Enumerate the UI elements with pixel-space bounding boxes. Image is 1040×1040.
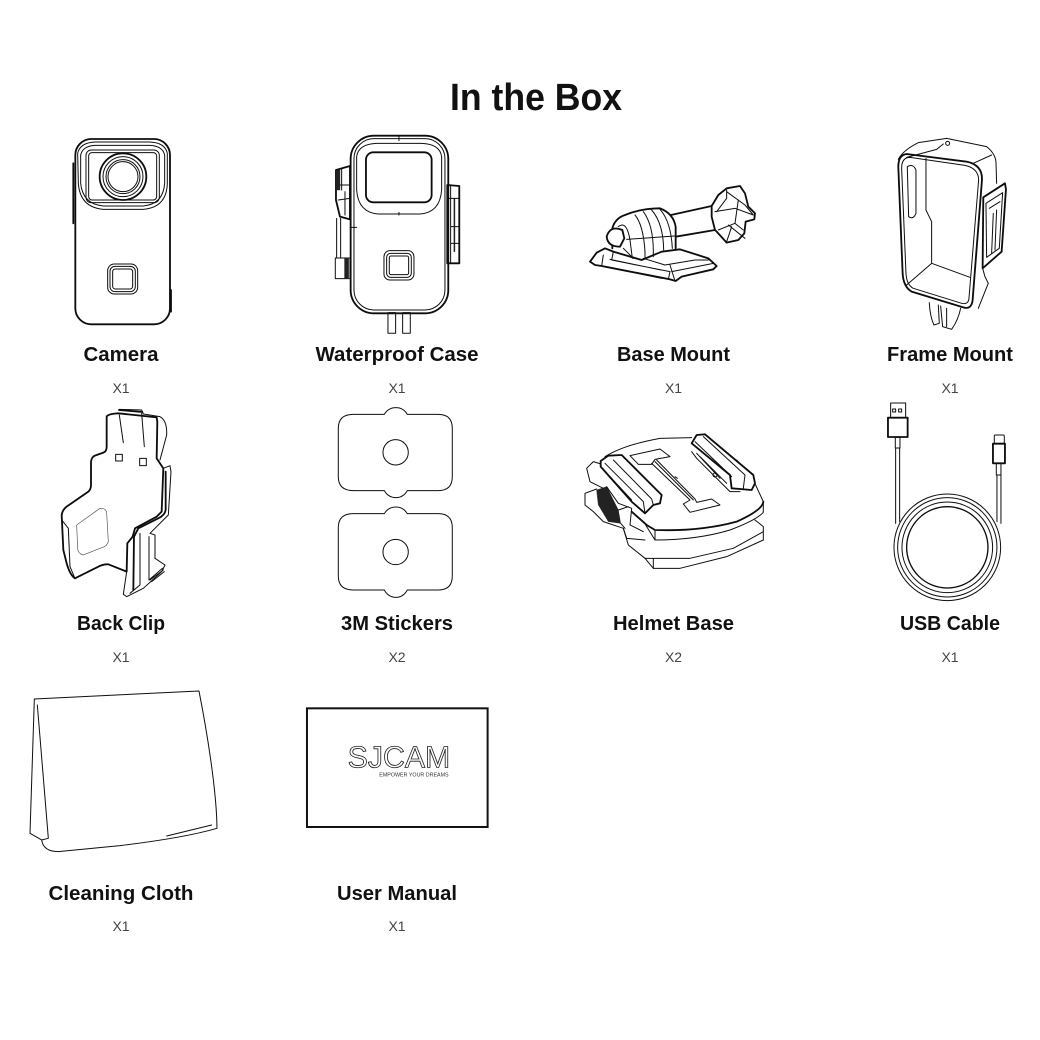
item: cleaning cloth	[30, 691, 217, 934]
quantity: waterproof case: X1	[388, 380, 406, 396]
item: frame mount	[887, 138, 1013, 396]
quantity: helmet base: X2	[665, 649, 682, 665]
quantity: back clip: X1	[112, 649, 130, 665]
icon: waterproof case	[335, 136, 459, 333]
item: base mount	[590, 186, 755, 396]
icon: base mount	[590, 186, 755, 281]
quantity: USB cable: X1	[941, 649, 959, 665]
label: user manual: User Manual	[337, 882, 457, 905]
quantity: cleaning cloth: X1	[112, 918, 130, 934]
label: back clip: Back Clip	[77, 612, 165, 635]
icon: frame mount	[898, 138, 1006, 329]
quantity: camera: X1	[112, 380, 130, 396]
item: helmet base	[585, 434, 763, 665]
title: In the Box	[450, 77, 622, 119]
quantity: 3M stickers: X2	[388, 649, 406, 665]
logo: SJCAM	[348, 740, 450, 774]
label: helmet base: Helmet Base	[613, 612, 734, 635]
icon: helmet base	[585, 434, 763, 568]
item: waterproof case	[316, 136, 478, 396]
label: 3M stickers: 3M Stickers	[341, 612, 453, 635]
label: waterproof case: Waterproof Case	[316, 343, 478, 366]
item: USB cable	[888, 403, 1005, 665]
item: back clip	[62, 409, 171, 665]
label: cleaning cloth: Cleaning Cloth	[48, 882, 194, 905]
item: camera	[73, 139, 171, 396]
quantity: base mount: X1	[665, 380, 682, 396]
tagline: EMPOWER YOUR DREAMS	[379, 773, 449, 779]
label: base mount: Base Mount	[617, 343, 730, 366]
manual cover	[307, 708, 488, 827]
label: camera: Camera	[84, 343, 159, 366]
icon: camera	[73, 139, 171, 324]
quantity: user manual: X1	[388, 918, 406, 934]
label: frame mount: Frame Mount	[887, 343, 1013, 366]
label: USB cable: USB Cable	[900, 612, 1000, 635]
quantity: frame mount: X1	[941, 380, 959, 396]
icon: cleaning cloth	[30, 691, 217, 852]
icon: USB cable	[888, 403, 1005, 601]
icon: 3M stickers	[338, 408, 452, 597]
item: 3M stickers	[338, 408, 453, 665]
item: user manual	[307, 708, 488, 934]
icon: user manual	[307, 708, 488, 827]
icon: back clip	[62, 409, 171, 597]
